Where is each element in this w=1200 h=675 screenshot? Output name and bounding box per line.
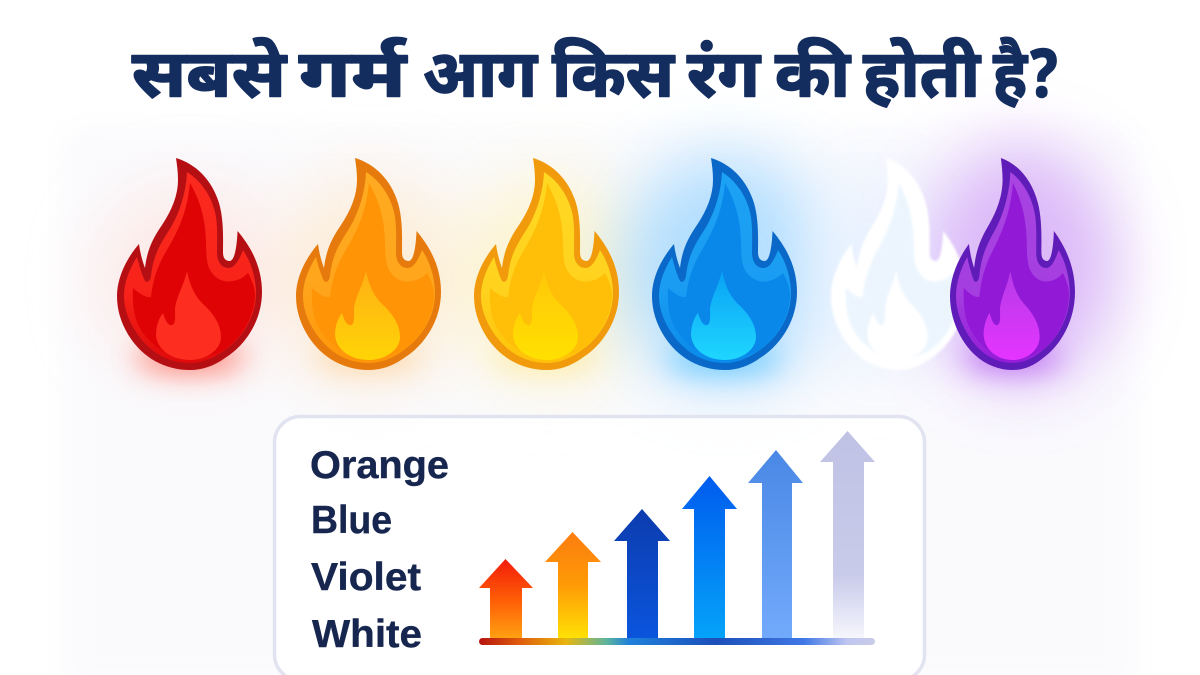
icon: red flame <box>117 158 262 370</box>
title: सबसे <box>132 36 287 124</box>
arrow: blue <box>682 476 737 638</box>
label: Blue: Blue <box>311 499 392 542</box>
title: होती <box>863 38 982 124</box>
axis bar <box>479 638 875 645</box>
arrow: pale lavender <box>820 431 875 638</box>
icon: blue flame <box>652 158 797 370</box>
title: गर्म <box>299 36 407 124</box>
arrow: orange <box>545 532 601 638</box>
icon: white flame <box>831 158 966 370</box>
arrow: light blue <box>748 450 803 638</box>
label: White: White <box>312 613 422 656</box>
arrow: dark blue <box>614 509 670 638</box>
panel: temperature scale <box>274 416 924 675</box>
chart: rising arrows <box>479 431 875 645</box>
title: किस <box>552 38 675 124</box>
title: रंग <box>687 38 761 124</box>
icon: yellow flame <box>474 158 619 370</box>
label: Violet: Violet <box>311 556 421 599</box>
icon: orange flame <box>296 158 441 370</box>
title: आग <box>423 38 538 124</box>
icon: violet flame <box>950 158 1075 370</box>
label: Orange: Orange <box>310 444 449 487</box>
title: है? <box>993 36 1060 124</box>
color list <box>310 444 449 656</box>
title: की <box>775 36 852 124</box>
title <box>132 36 1060 124</box>
arrow: red <box>479 559 533 638</box>
